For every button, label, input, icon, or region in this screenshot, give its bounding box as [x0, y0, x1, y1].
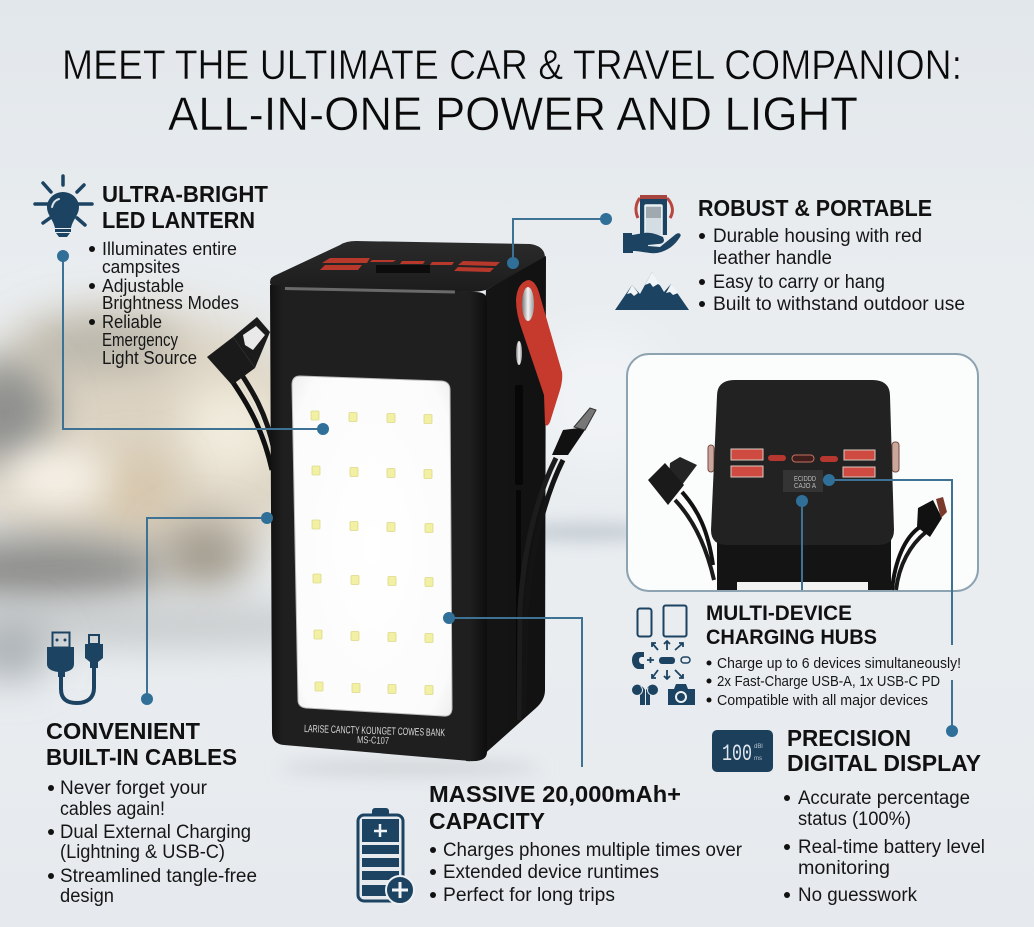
bullet list: Built to withstand outdoor use [713, 294, 965, 315]
heading: CAPACITY [429, 808, 545, 834]
icon: mountains [615, 272, 689, 310]
bullet list: leather handle [713, 248, 832, 269]
bullet list [89, 239, 239, 368]
inset display: CAJO A [794, 483, 816, 490]
device label [304, 723, 445, 747]
icon: digital display: ms [754, 756, 762, 762]
leader line: lantern [57, 250, 329, 435]
bullet list [784, 788, 985, 906]
section: precision digital display [712, 725, 985, 906]
bullet list: Adjustable [102, 276, 184, 296]
bullet list: monitoring [798, 858, 890, 879]
bullet list: campsites [102, 257, 180, 277]
device label: MS-C107 [357, 735, 390, 747]
red handle [516, 280, 562, 426]
heading: MULTI-DEVICE [706, 602, 852, 625]
bullet list: Charge up to 6 devices simultaneously! [717, 655, 961, 672]
bullet list: Brightness Modes [102, 293, 239, 313]
icon: digital display: dBl [754, 744, 763, 750]
right cable [519, 408, 596, 720]
icon: hand holding device [623, 195, 681, 253]
bullet list: (Lightning & USB-C) [60, 842, 225, 863]
inset USB ports [731, 449, 875, 477]
inset device lower body [717, 535, 891, 590]
top face [270, 241, 545, 292]
heading: DIGITAL DISPLAY [787, 750, 981, 776]
device label: LARISE CANCTY KOUNGET COWES BANK [304, 723, 445, 739]
heading: PRECISION [787, 725, 911, 751]
icon: USB cable [47, 632, 103, 703]
LED grid [311, 411, 433, 694]
leader line: robust [507, 213, 612, 269]
bullet list: Illuminates entire [102, 239, 237, 259]
heading [46, 718, 237, 770]
inset display: ECIDDD [794, 476, 816, 483]
bullet list [706, 655, 961, 709]
title: ALL-IN-ONE POWER AND LIGHT [168, 87, 858, 140]
bullet list: Extended device runtimes [443, 862, 659, 883]
bullet list: Never forget your [60, 778, 208, 799]
inset display [783, 470, 823, 492]
bullet list: Easy to carry or hang [713, 272, 885, 293]
bullet list: cables again! [60, 799, 165, 820]
product: power bank [207, 241, 596, 761]
icon: device hub [632, 606, 695, 705]
bullet list: Real-time battery level [798, 837, 985, 858]
bullet list: Emergency [102, 330, 178, 350]
heading: CONVENIENT [46, 718, 200, 744]
section: massive capacity [358, 781, 743, 906]
bullet list: No guesswork [798, 885, 917, 906]
heading: CHARGING HUBS [706, 626, 877, 649]
title [62, 41, 962, 140]
LED panel [292, 376, 452, 716]
inset USB-C port and lights [768, 455, 838, 462]
icon: battery [358, 808, 414, 904]
section: multi-device charging hubs [632, 602, 961, 709]
leader line: multi-device [796, 495, 808, 590]
bullet list [48, 778, 257, 907]
bullet list: Reliable [102, 312, 162, 332]
bullet list [430, 840, 743, 906]
side face [466, 256, 546, 761]
heading: ROBUST & PORTABLE [698, 195, 932, 221]
bullet list: Compatible with all major devices [717, 692, 928, 709]
heading [429, 781, 681, 834]
bullet list: Streamlined tangle-free [60, 866, 257, 887]
inset device top face [711, 380, 894, 545]
heading: ULTRA-BRIGHT [102, 181, 268, 207]
heading [102, 181, 268, 233]
heading [706, 602, 877, 649]
inset right cables [892, 497, 947, 590]
bullet list: Accurate percentage [798, 788, 970, 809]
leader line: capacity [443, 612, 582, 767]
front face [270, 285, 487, 761]
leader line: display [823, 474, 958, 737]
left cables [207, 317, 274, 470]
section: ultra-bright LED lantern [35, 176, 268, 368]
top ports [320, 258, 500, 273]
bullet list: Light Source [102, 348, 197, 368]
bullet list: Durable housing with red [713, 226, 922, 247]
bullet list: 2x Fast-Charge USB-A, 1x USB-C PD [717, 673, 940, 690]
leader line: cables [141, 512, 273, 705]
inset side knobs [708, 442, 899, 472]
heading: LED LANTERN [102, 207, 255, 233]
inset left cables [648, 457, 714, 580]
bullet list [699, 226, 965, 315]
bullet list: Dual External Charging [60, 822, 251, 843]
icon: light bulb [35, 176, 92, 237]
bullet list: Perfect for long trips [443, 885, 615, 906]
section: robust and portable [615, 195, 965, 315]
heading: MASSIVE 20,000mAh+ [429, 781, 681, 807]
icon: digital display [712, 730, 773, 772]
heading: BUILT-IN CABLES [46, 744, 237, 770]
icon: digital display: 100 [722, 741, 752, 767]
section: built-in cables [46, 632, 257, 907]
bullet list: design [60, 886, 114, 907]
rivets [516, 287, 534, 365]
heading [787, 725, 981, 776]
bullet list: Charges phones multiple times over [443, 840, 743, 861]
side ports [515, 385, 523, 720]
bullet list: status (100%) [798, 809, 911, 830]
inset panel: ports close-up [627, 354, 978, 591]
